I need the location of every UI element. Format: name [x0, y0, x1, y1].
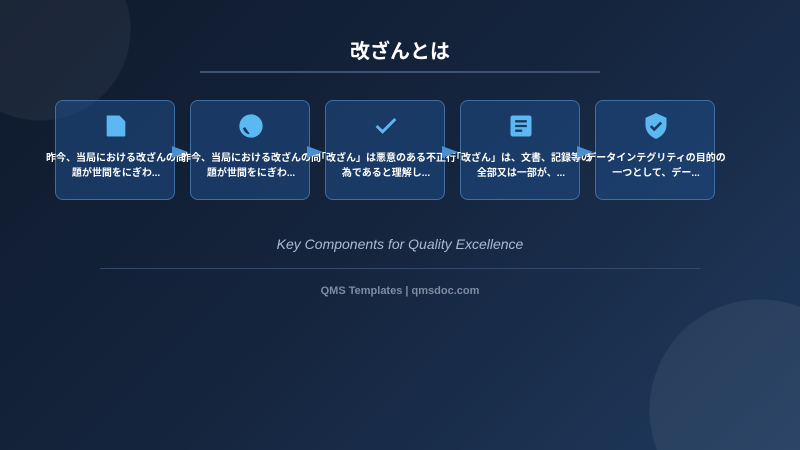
arrow 1	[172, 146, 188, 158]
card 2	[190, 100, 310, 200]
text 4	[451, 152, 591, 179]
icon: check	[376, 118, 396, 134]
text 3: 為であると理解し...	[342, 168, 430, 179]
text 2: 題が世間をにぎわ...	[207, 168, 295, 179]
text 1: 題が世間をにぎわ...	[72, 168, 160, 179]
card 4	[460, 100, 580, 200]
icon: shield	[646, 113, 666, 139]
icon: document	[106, 116, 126, 136]
card 1	[55, 100, 175, 200]
arrow 2	[307, 146, 323, 158]
text 5: データインテグリティの目的の	[586, 153, 726, 164]
text 2: 昨今、当局における改ざんの問	[181, 153, 321, 164]
arrow 3	[442, 146, 458, 158]
text 1	[46, 152, 186, 179]
card 5	[595, 100, 715, 200]
arrow 4	[577, 146, 593, 158]
title: 改ざんとは	[350, 41, 450, 63]
subtitle: Key Components for Quality Excellence	[277, 236, 523, 252]
text 5	[586, 152, 726, 179]
text 4: 全部又は一部が、...	[477, 168, 565, 179]
footer: QMS Templates | qmsdoc.com	[321, 285, 479, 297]
text 4: 「改ざん」は、文書、記録等の	[451, 153, 591, 164]
icon: list	[510, 116, 532, 136]
text 3: 「改ざん」は悪意のある不正行	[316, 153, 456, 164]
text 1: 昨今、当局における改ざんの問	[46, 153, 186, 164]
icon: circle	[239, 114, 263, 138]
card 3	[325, 100, 445, 200]
text 3	[316, 152, 456, 179]
text 2	[181, 152, 321, 179]
text 5: 一つとして、デー...	[612, 168, 700, 179]
